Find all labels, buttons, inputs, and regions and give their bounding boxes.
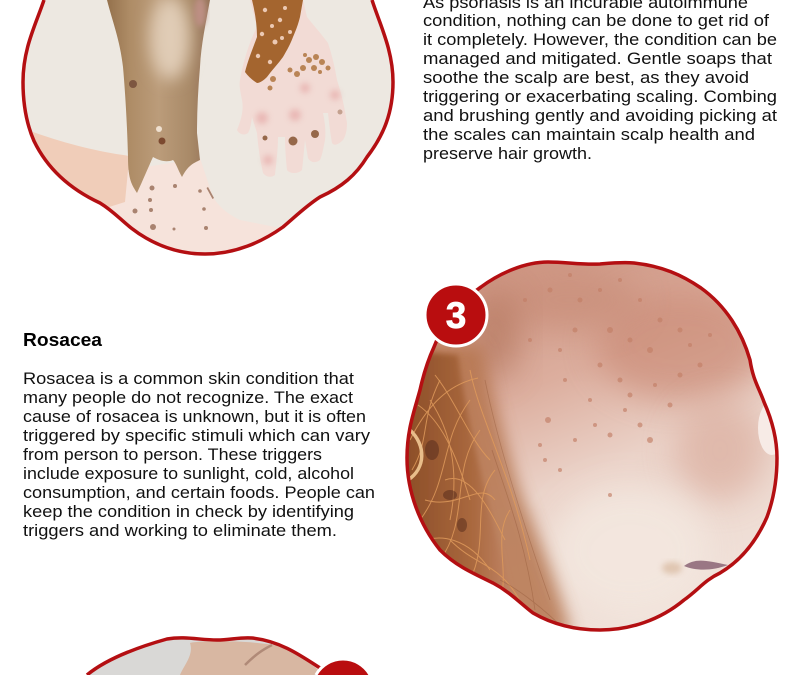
text block: rosacea description: many people do not recognize. The exact — [23, 388, 353, 407]
leg — [107, 0, 210, 193]
foot spots — [132, 184, 214, 230]
text block: rosacea description: cause of rosacea is unknown, but it is often — [23, 407, 366, 426]
nostril highlight — [758, 406, 775, 455]
panel: vitiligo skin photo blob — [0, 0, 400, 262]
lips — [684, 561, 728, 570]
text block: rosacea description: include exposure to sunlight, cold, alcohol — [23, 464, 354, 483]
badge: number 3 — [425, 284, 487, 346]
text block: psoriasis management: preserve hair growth. — [423, 144, 592, 163]
foot and lower skin — [109, 160, 278, 252]
text block: psoriasis management: soothe the scalp are best, as they avoid — [423, 68, 749, 87]
text block: rosacea description: consumption, and certain foods. People can — [23, 483, 375, 502]
text block: psoriasis management: triggering or exacerbating scaling. Combing — [423, 87, 777, 106]
text block: rosacea description: triggered by specific stimuli which can vary — [23, 426, 371, 445]
badge: number 3: 3 — [446, 295, 466, 336]
dark temple shading — [471, 290, 519, 380]
cheek redness — [595, 290, 765, 400]
panel: next condition photo blob — [80, 635, 330, 675]
text block: rosacea description: from person to person. These triggers — [23, 445, 322, 464]
text block: rosacea description — [23, 369, 375, 540]
text block: psoriasis management: the scales can maintain scalp health and — [423, 125, 755, 144]
text block: rosacea description: keep the condition in check by identifying — [23, 502, 354, 521]
hand — [237, 0, 347, 177]
peach thigh — [33, 132, 130, 208]
freckles — [523, 273, 712, 497]
text block: psoriasis management — [423, 0, 777, 163]
text block: rosacea description: Rosacea is a common skin condition that — [23, 369, 354, 388]
hand freckled patch — [268, 53, 330, 90]
knuckle marks — [262, 110, 342, 146]
text block: psoriasis management: and brushing gently and avoiding picking at — [423, 106, 777, 125]
text block: psoriasis management: managed and mitigated. Gentle soaps that — [423, 49, 772, 68]
hair — [432, 340, 580, 626]
text block: psoriasis management: condition, nothing can be done to get rid of — [423, 11, 769, 30]
text block: rosacea description: triggers and working to eliminate them. — [23, 521, 337, 540]
text block: psoriasis management: it completely. However, the condition can be — [423, 30, 777, 49]
panel: rosacea face photo blob — [400, 255, 786, 635]
heading: Rosacea: Rosacea — [23, 330, 103, 350]
hand brown pigment — [245, 0, 303, 83]
badge: number 4 (cropped) — [316, 659, 370, 675]
